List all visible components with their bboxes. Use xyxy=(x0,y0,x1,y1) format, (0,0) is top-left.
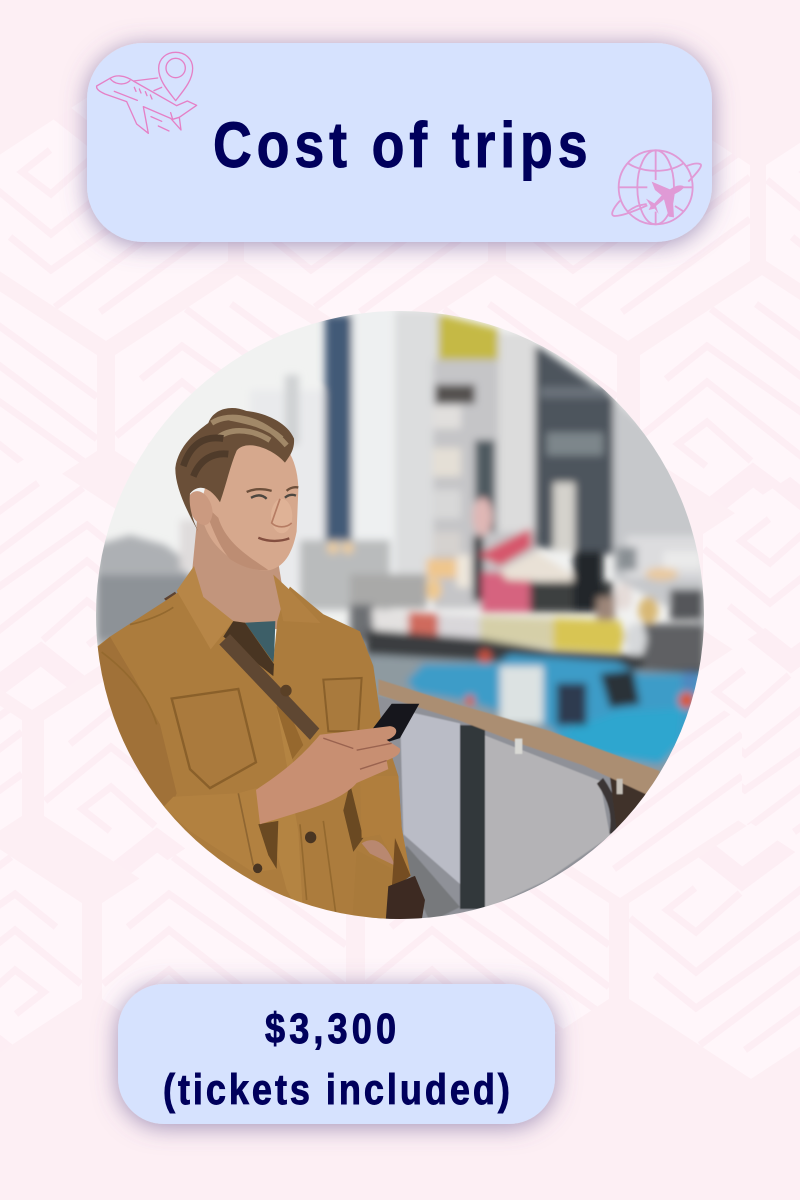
title: Cost of trips xyxy=(213,109,588,181)
jacket button xyxy=(280,685,292,697)
circular photo: traveller with phone on a canal street xyxy=(90,305,710,938)
ear xyxy=(188,491,213,525)
chest pockets xyxy=(172,689,256,788)
title panel xyxy=(87,43,712,242)
hair xyxy=(175,408,294,532)
phone xyxy=(373,704,420,742)
crossbody strap xyxy=(219,634,319,740)
hand xyxy=(256,726,400,824)
icon: globe with plane xyxy=(612,150,701,224)
eyes and brows xyxy=(247,487,298,492)
plane silhouette xyxy=(646,182,684,217)
price panel xyxy=(118,984,555,1124)
collar xyxy=(177,566,233,649)
blurred street background xyxy=(96,310,705,788)
jacket xyxy=(90,587,411,938)
neck xyxy=(192,518,287,630)
man xyxy=(90,408,425,938)
jacket shading xyxy=(98,636,176,806)
nose and smile xyxy=(272,499,292,527)
shoulder bag strap behind xyxy=(164,592,176,600)
price note: (tickets included) xyxy=(163,1066,510,1114)
cuff xyxy=(392,838,410,885)
price: $3,300 xyxy=(265,1005,396,1053)
railing and fence xyxy=(370,679,670,922)
bag xyxy=(385,876,425,931)
icon: plane and location pin xyxy=(97,52,197,133)
lower pocket with hand xyxy=(362,840,395,866)
T-shirt xyxy=(244,621,275,664)
face xyxy=(202,437,298,570)
